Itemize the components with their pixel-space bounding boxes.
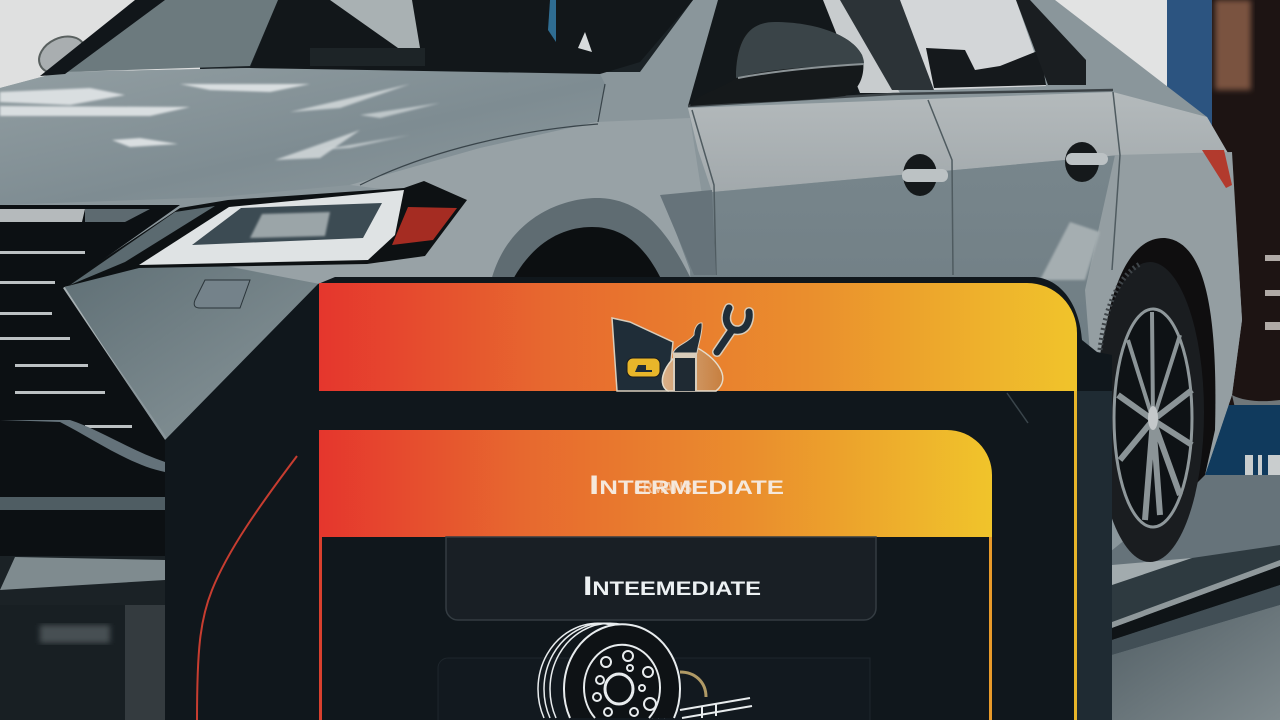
tyre face [564, 624, 680, 718]
hub [605, 674, 633, 704]
red curved accent line [197, 456, 297, 720]
car: side mirror [690, 22, 864, 106]
car: rear quarter panel [1085, 152, 1242, 480]
car: headlight [60, 181, 467, 288]
car: windshield glass [65, 0, 278, 72]
icon: can label [627, 358, 660, 377]
car: b-pillars [840, 0, 934, 90]
panel right outer strip [1077, 391, 1112, 720]
car: grille [0, 205, 180, 556]
car: rear wheel [1096, 262, 1204, 562]
brake disc [584, 645, 660, 718]
car: hood [0, 68, 606, 205]
second orange band [319, 430, 992, 537]
car: rear quarter window [1016, 0, 1086, 85]
band heading text: ermans [634, 472, 692, 498]
car: tail light [1202, 150, 1232, 188]
tyre treads [538, 623, 670, 718]
car: door handles [902, 142, 1108, 196]
car: rear wheel arch [1100, 238, 1215, 500]
icon: nozzle [673, 323, 702, 353]
car: a-pillar [40, 0, 165, 76]
right yellow edge line [1074, 391, 1077, 720]
car: reflection on rear door [1040, 222, 1100, 280]
label text: Inteemediate [583, 571, 761, 601]
dark info panel [165, 277, 1112, 720]
inner label box [446, 537, 876, 620]
car: door seams [692, 92, 1120, 275]
car: window trim [688, 90, 1113, 106]
left red and right orange side lines [319, 537, 992, 720]
icon: oil can and wrench [612, 308, 749, 391]
icon: bottle [673, 353, 697, 391]
car: interior details [310, 0, 592, 66]
far side mirror [33, 29, 91, 81]
icon: bulb [662, 345, 723, 391]
faint panel streak [1007, 393, 1028, 423]
car: main body silhouette [0, 0, 1242, 560]
icon: tyre and brake disc [538, 623, 752, 718]
car: windshield dark interior [250, 0, 693, 74]
car: window light patch [823, 0, 900, 93]
icon: wrench [717, 308, 749, 352]
car: front side window [688, 0, 893, 106]
car: hood crease [360, 84, 605, 185]
lower card [438, 658, 870, 720]
disc ornaments [593, 651, 656, 716]
car: door lower panel [662, 155, 1130, 560]
car: fender [225, 118, 716, 285]
top orange header band [319, 283, 1077, 391]
car: bumper [63, 262, 320, 438]
caliper and tool [680, 672, 706, 697]
car: door upper panel [688, 92, 1232, 192]
car photo [0, 0, 1242, 562]
car: side vent [660, 190, 716, 275]
car: front wheel arch [490, 198, 694, 285]
car: seat in rear window [926, 48, 1046, 88]
band heading text: Intermediate [589, 470, 784, 500]
car: rear side window [900, 0, 1046, 90]
car: tow hook cover [194, 280, 250, 308]
car: hood highlights [0, 84, 440, 160]
car: bumper edge trim [63, 288, 165, 445]
icon: oil can [612, 318, 673, 391]
